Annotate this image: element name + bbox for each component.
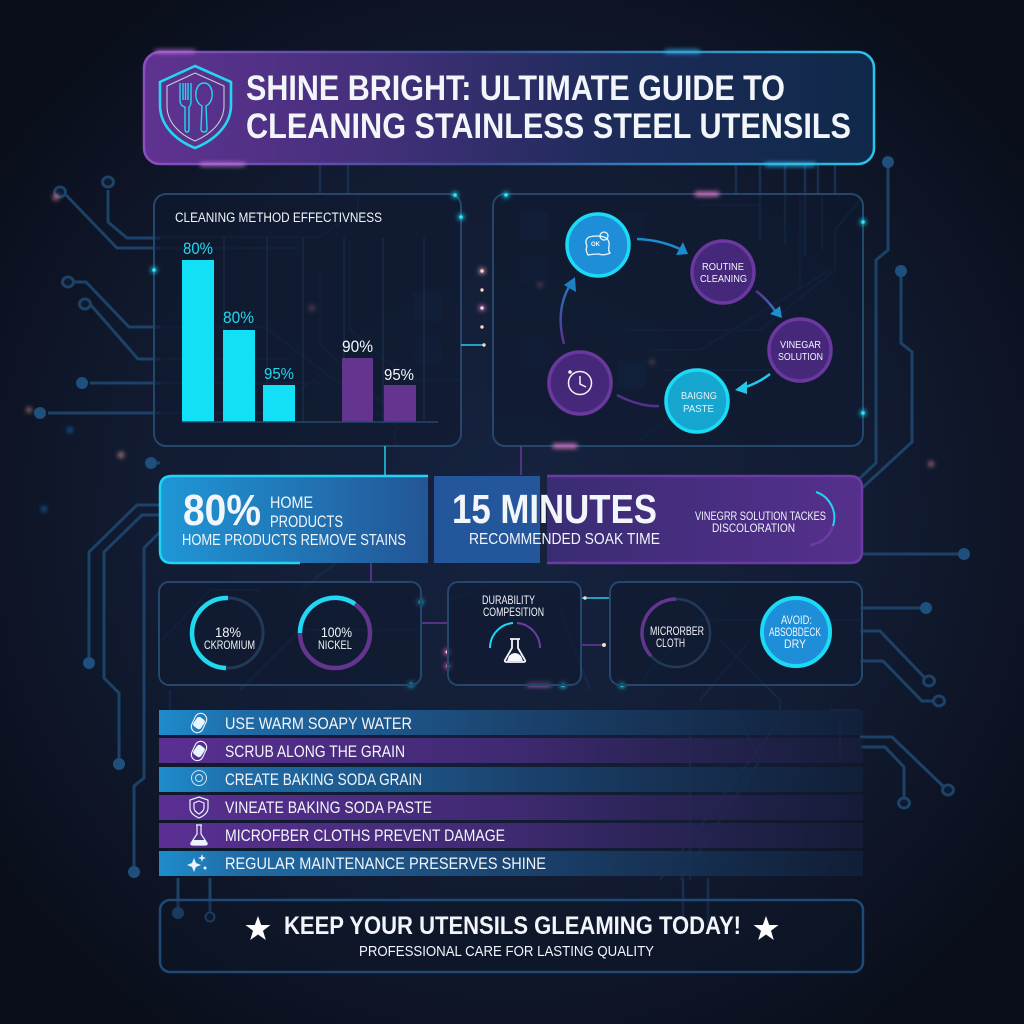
call to action heading: KEEP YOUR UTENSILS GLEAMING TODAY! bbox=[284, 912, 741, 940]
panel: durability composition: DURABILITY bbox=[482, 595, 535, 607]
step: vinegar solution: SOLUTION bbox=[778, 351, 823, 363]
arrow: routine cleaning to vinegar solution bbox=[756, 291, 782, 318]
panel: cleaning cycle bbox=[493, 194, 863, 446]
tip 6: REGULAR MAINTENANCE PRESERVES SHINE bbox=[225, 854, 546, 873]
tip 2 bbox=[159, 738, 863, 763]
stats banner bbox=[160, 476, 862, 563]
title: CLEANING STAINLESS STEEL UTENSILS bbox=[246, 107, 851, 146]
step: vinegar solution bbox=[769, 319, 831, 381]
icon: left star bbox=[246, 916, 270, 940]
bar chart: 80% bbox=[183, 239, 213, 258]
ring: microfiber cloth: CLOTH bbox=[656, 636, 685, 650]
step: baking paste bbox=[666, 370, 728, 432]
tip 4: VINEATE BAKING SODA PASTE bbox=[225, 798, 432, 817]
title: SHINE BRIGHT: ULTIMATE GUIDE TO bbox=[246, 69, 785, 108]
step: routine cleaning bbox=[692, 241, 754, 303]
icon: soap bbox=[189, 711, 209, 735]
icon: right star bbox=[754, 916, 778, 940]
panel: chromium and nickel composition bbox=[159, 582, 421, 685]
bar chart: 95% bbox=[384, 367, 414, 384]
arrow: vinegar solution to baking paste bbox=[735, 374, 770, 394]
step: timer bbox=[549, 352, 611, 414]
tip 5 bbox=[159, 823, 863, 848]
tip 2: SCRUB ALONG THE GRAIN bbox=[225, 742, 405, 761]
ring: microfiber cloth: MICRORBER bbox=[650, 624, 704, 638]
bar chart: 95% bbox=[264, 366, 294, 383]
stat: vinegar solution note: VINEGRR SOLUTION TACKES bbox=[695, 511, 826, 523]
arc gauge bbox=[490, 623, 540, 648]
call to action subtext: PROFESSIONAL CARE FOR LASTING QUALITY bbox=[359, 943, 654, 960]
badge: avoid absorbent dry: DRY bbox=[784, 639, 806, 651]
icon: clock bbox=[568, 371, 592, 394]
icon: target badge bbox=[192, 770, 206, 786]
panel: cleaning method effectiveness bar chart bbox=[154, 194, 461, 446]
stat: vinegar solution note: DISCOLORATION bbox=[712, 523, 795, 535]
icon: flask bbox=[505, 639, 525, 662]
ring: 100% nickel: 100% bbox=[321, 624, 352, 640]
step: baking paste: BAIGNG bbox=[681, 390, 717, 402]
chart title: CLEANING METHOD EFFECTIVNESS bbox=[175, 210, 382, 225]
arrow: timer to soap bbox=[561, 277, 576, 344]
tip 5: MICROFBER CLOTHS PREVENT DAMAGE bbox=[225, 826, 505, 845]
tip 3 bbox=[159, 767, 863, 792]
step: baking paste: PASTE bbox=[683, 403, 714, 415]
tips list bbox=[159, 710, 863, 876]
stat: 15 minutes soak time bbox=[434, 476, 862, 563]
step: soap bbox=[567, 214, 629, 276]
stat: 80% home products bbox=[160, 476, 428, 563]
ring: 100% nickel bbox=[300, 598, 370, 668]
icon: flask bbox=[191, 825, 207, 845]
stat: 15 minutes soak time: RECOMMENDED SOAK TIME bbox=[469, 531, 660, 548]
step: routine cleaning: CLEANING bbox=[700, 273, 747, 285]
stat: 80% home products: HOME bbox=[270, 494, 313, 512]
icon: shield with fork and spoon bbox=[160, 66, 231, 148]
tip 3: CREATE BAKING SODA GRAIN bbox=[225, 770, 422, 789]
panel: microfiber cloth and avoid bbox=[610, 582, 862, 685]
bar chart: 80% bbox=[223, 308, 254, 327]
tip 4 bbox=[159, 795, 863, 820]
stat: 80% home products: HOME PRODUCTS REMOVE STAINS bbox=[182, 532, 406, 549]
arrow: soap to routine cleaning bbox=[637, 239, 688, 255]
badge: avoid absorbent dry bbox=[762, 598, 830, 666]
stat: 15 minutes soak time: 15 MINUTES bbox=[452, 486, 657, 532]
header banner bbox=[144, 50, 874, 166]
tip 1 bbox=[159, 710, 863, 735]
arrow: baking paste to timer bbox=[617, 395, 659, 406]
title bbox=[246, 69, 851, 146]
connectors and glow nodes bbox=[151, 192, 866, 688]
ring: microfiber cloth bbox=[642, 599, 710, 667]
step: soap: OK bbox=[591, 242, 601, 248]
stat: 80% home products: PRODUCTS bbox=[270, 513, 343, 531]
ring: 100% nickel: NICKEL bbox=[318, 638, 352, 652]
stat: 80% home products: 80% bbox=[183, 486, 261, 535]
ring: 18% chromium: 18% bbox=[215, 624, 241, 640]
tip 6 bbox=[159, 851, 863, 876]
icon: soap bar bbox=[586, 232, 610, 255]
tip 1: USE WARM SOAPY WATER bbox=[225, 714, 412, 733]
ring: 18% chromium: CKROMIUM bbox=[204, 638, 255, 652]
badge: avoid absorbent dry: AVOID: bbox=[781, 615, 812, 627]
panel: durability composition bbox=[448, 582, 581, 685]
stat: vinegar solution note bbox=[695, 492, 834, 545]
icon: shield bbox=[190, 797, 208, 818]
badge: avoid absorbent dry: ABSOBDECK bbox=[769, 627, 821, 639]
icon: sparkles bbox=[187, 854, 206, 872]
ring: 18% chromium bbox=[192, 598, 263, 668]
bar chart bbox=[182, 238, 438, 422]
step: routine cleaning: ROUTINE bbox=[702, 261, 744, 273]
icon: scrub brush bbox=[189, 739, 209, 763]
bar chart: 90% bbox=[342, 338, 373, 356]
call to action panel bbox=[160, 900, 863, 972]
step: vinegar solution: VINEGAR bbox=[780, 339, 821, 351]
panel: durability composition: COMPESITION bbox=[483, 607, 544, 619]
